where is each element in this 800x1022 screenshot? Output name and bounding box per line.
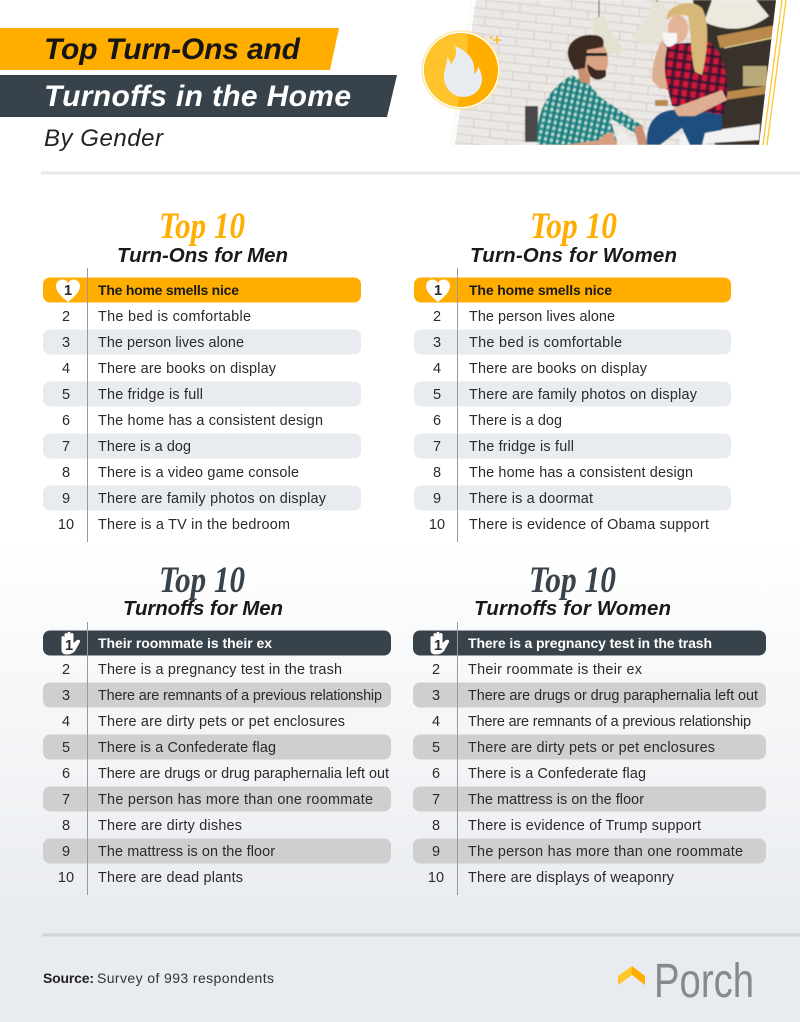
panel: turn-ons for men: The person lives alone bbox=[98, 335, 244, 351]
panel: turn-ons for men: 7 bbox=[62, 439, 70, 455]
panel: turnoffs for men: There is a Confederate flag bbox=[98, 740, 276, 756]
panel: turn-ons for women: 5 bbox=[433, 387, 441, 403]
highlighted row 1: Their roommate is their ex bbox=[98, 635, 272, 651]
panel: turnoffs for men: The person has more than one roommate bbox=[98, 792, 373, 808]
panel: turnoffs for women: There are remnants of a previous relationship bbox=[468, 714, 751, 730]
yellow accent lines bbox=[763, 0, 786, 145]
panel: turn-ons for men: There is a video game console bbox=[98, 465, 299, 481]
panel: turn-ons for women: 9 bbox=[433, 491, 441, 507]
panel: turn-ons for men: 10 bbox=[58, 517, 74, 533]
panel: turnoffs for men: There are remnants of a previous relationship bbox=[98, 688, 382, 704]
panel: turn-ons for women: There is a doormat bbox=[469, 491, 593, 507]
panel: turnoffs for men: 5 bbox=[62, 740, 70, 756]
panel: turnoffs for women: 6 bbox=[432, 766, 440, 782]
man bbox=[537, 75, 643, 145]
panel: turn-ons for men: 3 bbox=[62, 335, 70, 351]
panel: turnoffs for women bbox=[413, 560, 766, 895]
panel: turnoffs for men: 2 bbox=[62, 662, 70, 678]
heading: top 10 women turn-ons: Top 10 bbox=[530, 206, 617, 247]
panel: turn-ons for men: 8 bbox=[62, 465, 70, 481]
panel: turn-ons for men: 5 bbox=[62, 387, 70, 403]
shelves dark area bbox=[693, 0, 780, 145]
panel: turn-ons for women: 10 bbox=[429, 517, 445, 533]
panel: turnoffs for women: 5 bbox=[432, 740, 440, 756]
panel: turnoffs for women: 4 bbox=[432, 714, 440, 730]
panel: turnoffs for women: 3 bbox=[432, 688, 440, 704]
panel: turnoffs for men: 10 bbox=[58, 870, 74, 886]
highlighted row 1: 1 bbox=[64, 283, 72, 299]
panel: turn-ons for women: The bed is comfortable bbox=[469, 335, 622, 351]
panel: turnoffs for men bbox=[43, 560, 391, 895]
panel: turn-ons for men: 6 bbox=[62, 413, 70, 429]
panel: turnoffs for men: There is a pregnancy test in the trash bbox=[98, 662, 342, 678]
logo: Porch bbox=[618, 955, 754, 1008]
panel: turn-ons for men: There are books on display bbox=[98, 361, 277, 377]
panel: turnoffs for men: 3 bbox=[62, 688, 70, 704]
highlighted row 1: The home smells nice bbox=[98, 282, 239, 298]
icon: flame badge bbox=[420, 30, 501, 110]
panel: turnoffs for men: The mattress is on the floor bbox=[98, 844, 275, 860]
panel: turnoffs for women: 2 bbox=[432, 662, 440, 678]
title banner: turnoffs: Turnoffs in the Home bbox=[44, 80, 351, 113]
highlighted row 1 bbox=[43, 278, 361, 302]
panel: turnoffs for men: There are drugs or drug paraphernalia left out bbox=[98, 766, 389, 782]
panel: turn-ons for men bbox=[43, 206, 361, 542]
panel: turn-ons for women: The fridge is full bbox=[469, 439, 574, 455]
panel: turnoffs for men: There are dirty dishes bbox=[98, 818, 242, 834]
panel: turnoffs for women: There are displays of weaponry bbox=[468, 870, 675, 886]
panel: turn-ons for women: There are family photos on display bbox=[469, 387, 698, 403]
panel: turnoffs for men: 6 bbox=[62, 766, 70, 782]
highlighted row 1 bbox=[413, 630, 766, 656]
heading: top 10 men turnoffs: Top 10 bbox=[159, 560, 245, 601]
panel: turnoffs for women: The mattress is on the floor bbox=[468, 792, 644, 808]
panel: turn-ons for women: There are books on display bbox=[469, 361, 648, 377]
panel: turnoffs for women: There are drugs or drug paraphernalia left out bbox=[468, 688, 758, 704]
title banner: turn-ons bbox=[0, 28, 339, 70]
photo: couple in kitchen bbox=[445, 0, 786, 146]
highlighted row 1: There is a pregnancy test in the trash bbox=[468, 635, 712, 651]
panel: turn-ons for women: 3 bbox=[433, 335, 441, 351]
panel: turn-ons for men: The bed is comfortable bbox=[98, 309, 251, 325]
source note: Source: bbox=[43, 970, 94, 986]
panel: turn-ons for women: There is evidence of Obama support bbox=[469, 517, 709, 533]
woman bbox=[647, 108, 722, 145]
heading: turnoffs for men: Turnoffs for Men bbox=[123, 597, 283, 620]
panel: turn-ons for women: 2 bbox=[433, 309, 441, 325]
panel: turnoffs for men: There are dirty pets or pet enclosures bbox=[98, 714, 345, 730]
divider bottom bbox=[42, 934, 800, 936]
panel: turn-ons for men: 9 bbox=[62, 491, 70, 507]
source note: Survey of 993 respondents bbox=[97, 970, 274, 986]
panel: turnoffs for men: 7 bbox=[62, 792, 70, 808]
panel: turn-ons for women: 7 bbox=[433, 439, 441, 455]
panel: turn-ons for men: There is a TV in the bedroom bbox=[98, 517, 290, 533]
panel: turn-ons for women: The person lives alone bbox=[469, 309, 615, 325]
highlighted row 1: 1 bbox=[65, 638, 73, 654]
highlighted row 1: The home smells nice bbox=[469, 282, 612, 298]
panel: turnoffs for men: 8 bbox=[62, 818, 70, 834]
panel: turnoffs for women: There is evidence of Trump support bbox=[468, 818, 701, 834]
panel: turnoffs for women: There are dirty pets or pet enclosures bbox=[468, 740, 715, 756]
highlighted row 1: 1 bbox=[434, 638, 442, 654]
heading: top 10 men turn-ons: Top 10 bbox=[159, 206, 245, 247]
panel: turnoffs for women: 7 bbox=[432, 792, 440, 808]
panel: turnoffs for men: 4 bbox=[62, 714, 70, 730]
highlighted row 1: 1 bbox=[434, 283, 442, 299]
divider top bbox=[41, 172, 800, 174]
panel: turn-ons for men: There is a dog bbox=[98, 439, 191, 455]
heading: top 10 women turnoffs: Top 10 bbox=[529, 560, 616, 601]
panel: turn-ons for women: There is a dog bbox=[469, 413, 562, 429]
logo: Porch: Porch bbox=[654, 955, 754, 1008]
title banner: turn-ons: Top Turn-Ons and bbox=[44, 33, 301, 66]
highlighted row 1 bbox=[414, 278, 731, 302]
panel: turn-ons for women: 6 bbox=[433, 413, 441, 429]
highlighted row 1 bbox=[43, 630, 391, 656]
panel: turnoffs for men: There are dead plants bbox=[98, 870, 243, 886]
panel: turn-ons for men: The fridge is full bbox=[98, 387, 203, 403]
panel: turn-ons for men: There are family photos on display bbox=[98, 491, 327, 507]
panel: turnoffs for women: 8 bbox=[432, 818, 440, 834]
panel: turnoffs for women: 10 bbox=[428, 870, 444, 886]
heading: turn-ons for men: Turn-Ons for Men bbox=[117, 244, 288, 267]
chair bbox=[525, 106, 538, 142]
man's hand and mug bbox=[597, 132, 618, 145]
panel: turn-ons for women bbox=[414, 206, 731, 542]
panel: turnoffs for women: 9 bbox=[432, 844, 440, 860]
subtitle: By Gender bbox=[44, 125, 164, 152]
panel: turnoffs for men: 9 bbox=[62, 844, 70, 860]
panel: turnoffs for women: There is a Confederate flag bbox=[468, 766, 646, 782]
panel: turn-ons for men: The home has a consistent design bbox=[98, 413, 323, 429]
panel: turn-ons for women: 8 bbox=[433, 465, 441, 481]
heading: turnoffs for women: Turnoffs for Women bbox=[474, 597, 671, 620]
lamps bbox=[598, 0, 600, 18]
panel: turn-ons for men: 2 bbox=[62, 309, 70, 325]
panel: turn-ons for men: 4 bbox=[62, 361, 70, 377]
counter bbox=[680, 124, 760, 145]
panel: turnoffs for women: The person has more than one roommate bbox=[468, 844, 743, 860]
panel: turnoffs for women: Their roommate is their ex bbox=[468, 662, 643, 678]
title banner: turnoffs bbox=[0, 75, 397, 117]
heading: turn-ons for women: Turn-Ons for Women bbox=[470, 244, 677, 267]
panel: turn-ons for women: The home has a consistent design bbox=[469, 465, 693, 481]
panel: turn-ons for women: 4 bbox=[433, 361, 441, 377]
